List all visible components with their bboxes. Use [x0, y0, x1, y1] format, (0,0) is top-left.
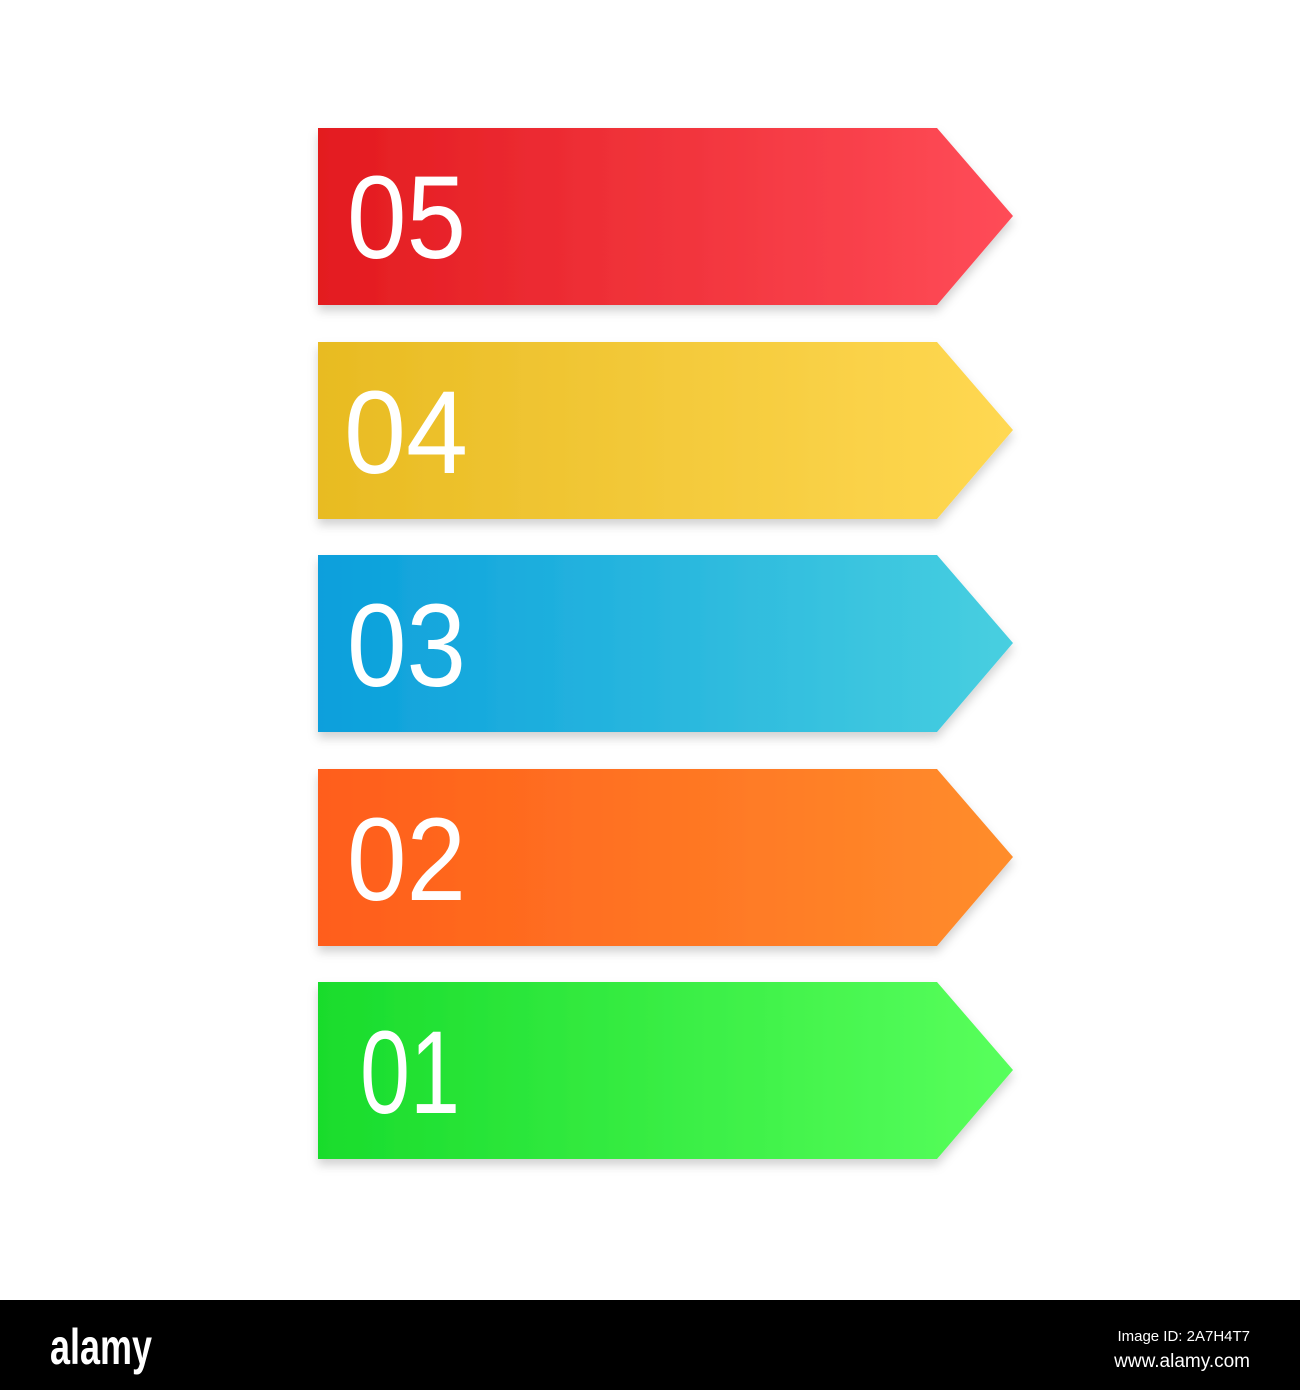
- footer bar: Image ID: 2A7H4T7: [1117, 1328, 1250, 1345]
- banner 04: [318, 342, 1013, 519]
- footer bar: alamy: [50, 1319, 152, 1375]
- banner 03: 03: [347, 580, 466, 712]
- footer bar: www.alamy.com: [1113, 1351, 1250, 1372]
- banner 01: 01: [360, 1007, 460, 1139]
- banner 02: [318, 769, 1013, 946]
- banner 04: 04: [344, 367, 468, 499]
- banner 02: 02: [347, 794, 466, 926]
- footer bar: [0, 1300, 1300, 1390]
- banner 05: 05: [347, 152, 466, 284]
- banner 01: [318, 982, 1013, 1159]
- banner 05: [318, 128, 1013, 305]
- banner 03: [318, 555, 1013, 732]
